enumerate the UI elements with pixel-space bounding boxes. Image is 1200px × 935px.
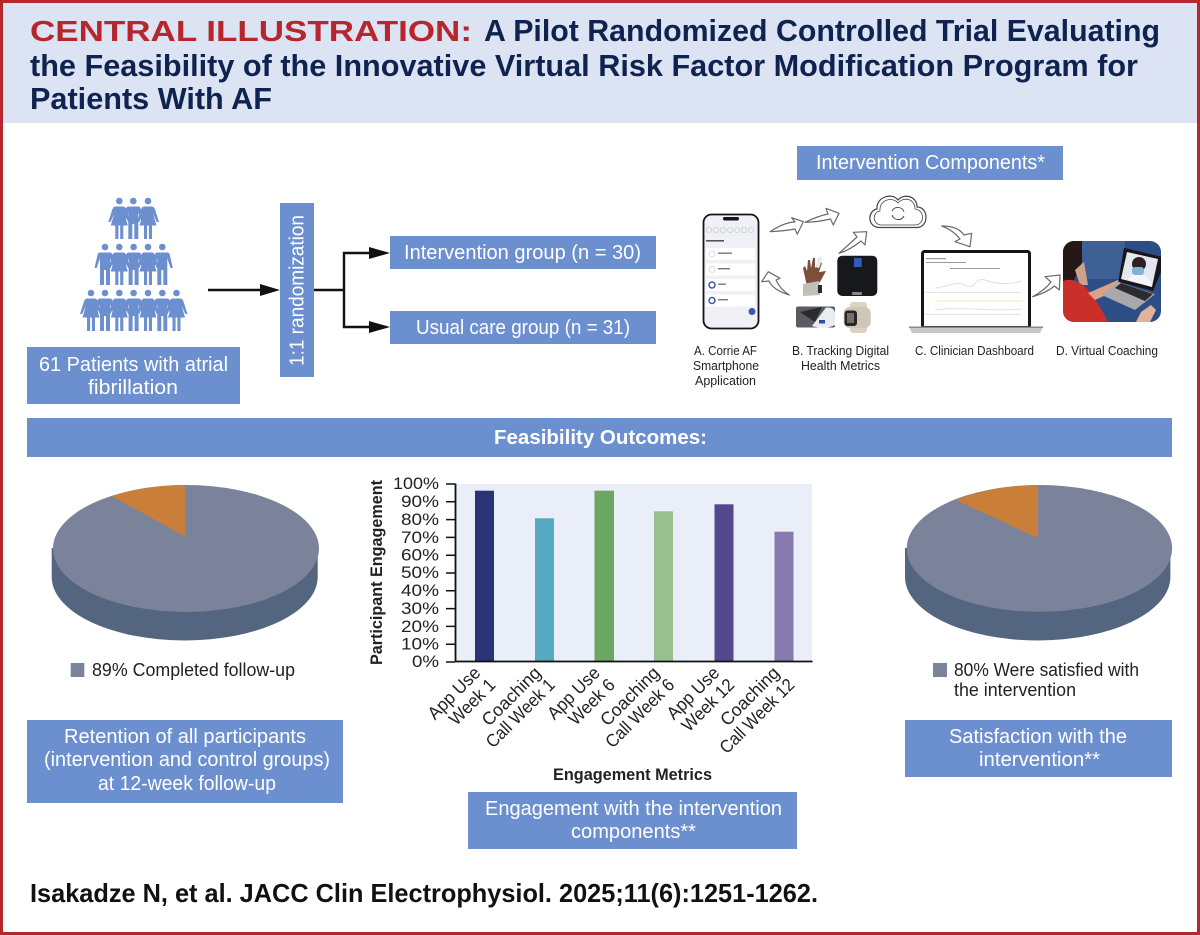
bar chart: engagement [367,474,812,784]
usual care group box: Usual care group (n = 31) [416,317,630,339]
icon: clinician dashboard laptop [909,252,1043,333]
x axis labels: Call Week 12 [716,675,798,757]
icon: cloud sync [870,196,926,228]
legend: satisfaction: 80% Were satisfied with [954,660,1139,680]
arrows: randomization to groups [314,247,390,333]
component captions [693,343,1158,388]
title: CENTRAL ILLUSTRATION: [30,16,472,48]
icon: blood pressure cuff [796,306,835,328]
intervention group box [390,236,656,269]
plot background [456,484,812,662]
photo: virtual coaching [1063,241,1161,322]
icon: group of patients [80,198,188,331]
caption A: Application [695,373,756,388]
patients label: 61 Patients with atrial [39,354,228,376]
y axis labels: 70% [401,528,439,547]
satisfaction label [905,720,1172,777]
title: A Pilot Randomized Controlled Trial Evaluating [484,13,1160,48]
title: Patients With AF [30,81,272,116]
intervention group box: Intervention group (n = 30) [404,242,641,264]
arrows: data flow [762,208,1060,297]
randomization box [280,203,314,377]
satisfaction label: intervention** [979,749,1100,771]
x axis labels: Call Week 6 [601,675,678,752]
pie chart: retention [52,485,319,640]
y axis labels: 90% [401,492,439,511]
citation: Isakadze N, et al. JACC Clin Electrophysiol. 2025;11(6):1251-1262. [30,878,818,908]
legend: satisfaction [933,660,1139,700]
title: the Feasibility of the Innovative Virtual Risk Factor Modification Program for [30,48,1138,83]
retention label [27,720,343,803]
y axis labels: 0% [412,652,439,671]
x axis labels: App Use [424,663,484,723]
arrow: patients to randomization [208,284,280,296]
caption D: D. Virtual Coaching [1056,343,1158,358]
x axis labels: App Use [663,663,723,723]
y axis labels: 80% [401,510,439,529]
retention label: Retention of all participants [64,726,306,748]
y axis labels: 100% [393,474,439,493]
retention label: at 12-week follow-up [98,773,276,795]
icon: smartphone app [704,214,758,328]
y axis labels [393,474,439,671]
usual care group box [390,311,656,344]
intervention components heading: Intervention Components* [816,152,1045,174]
caption A: A. Corrie AF [694,343,757,358]
icon: smart scale [837,256,877,296]
pie chart: satisfaction [905,485,1172,640]
satisfaction label: Satisfaction with the [949,726,1127,748]
caption B: B. Tracking Digital [792,343,889,358]
feasibility outcomes banner [27,418,1172,457]
caption C: C. Clinician Dashboard [915,343,1034,358]
y axis labels: 40% [401,581,439,600]
caption B: Health Metrics [801,358,880,373]
retention label: (intervention and control groups) [44,749,330,771]
x axis labels [424,663,798,757]
y axis labels: 10% [401,634,439,654]
engagement label: Engagement with the intervention [485,798,782,820]
feasibility outcomes banner: Feasibility Outcomes: [494,427,707,449]
x axis labels: Week 12 [678,675,738,735]
y axis title: Participant Engagement [367,480,386,665]
caption A [693,343,759,388]
randomization box: 1:1 randomization [286,215,308,366]
y axis labels: 50% [401,563,439,582]
axes [446,484,812,662]
caption B [792,343,889,373]
x axis title: Engagement Metrics [553,765,712,784]
y axis labels: 20% [401,617,439,636]
header banner [3,3,1197,123]
icon: wrist monitor [803,257,826,296]
icon: smartwatch [844,302,871,333]
legend: satisfaction: the intervention [954,680,1076,700]
caption A: Smartphone [693,358,759,373]
engagement label [468,792,797,849]
patients label: fibrillation [88,377,178,399]
x axis labels: Coaching [596,663,663,730]
x axis labels: Week 1 [445,675,499,729]
x axis labels: Coaching [716,663,783,730]
legend: retention: 89% Completed follow-up [92,660,295,680]
x axis labels: Call Week 1 [482,675,559,752]
x axis labels: Week 6 [564,675,619,729]
title [30,13,1160,116]
engagement label: components** [571,821,696,843]
bars [475,491,794,662]
intervention components heading [797,146,1063,180]
x axis labels: Coaching [478,663,545,730]
x axis labels: App Use [543,663,604,723]
y axis labels: 30% [401,599,439,618]
y axis labels: 60% [401,546,439,564]
patients label [27,347,240,404]
